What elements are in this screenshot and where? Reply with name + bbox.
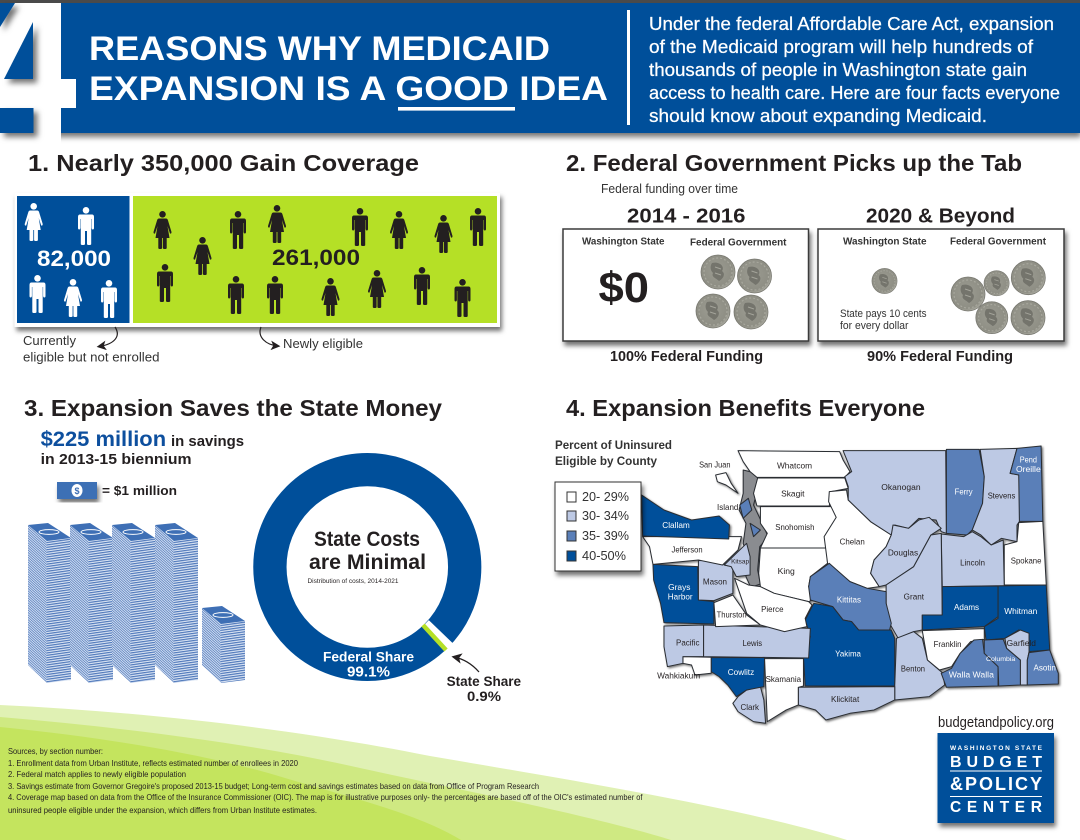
- sources text: 2. Federal match applies to newly eligible population: [8, 769, 186, 779]
- box: 2020 and beyond: for every dollar: [840, 320, 909, 332]
- county labels: Columbia: [986, 656, 1015, 663]
- heading 1: 1. Nearly 350,000 Gain Coverage: [28, 150, 419, 176]
- county labels: San Juan: [699, 459, 731, 469]
- key label: = $1 million: [102, 483, 177, 498]
- intro paragraph: Under the federal Affordable Care Act, expansion: [649, 14, 1054, 34]
- state share label: 0.9%: [467, 689, 501, 704]
- box: 2014-2016: Federal Government: [690, 236, 787, 248]
- header top rule: [0, 0, 1080, 3]
- arrow: currently eligible: [99, 327, 117, 346]
- county labels: Adams: [954, 602, 979, 612]
- caption 90 percent: 90% Federal Funding: [867, 348, 1013, 365]
- panel: 3 savings: [24, 395, 522, 704]
- county labels: Oreille: [1016, 464, 1041, 474]
- people frame: [14, 193, 500, 327]
- county labels: King: [778, 566, 795, 576]
- map legend: [555, 482, 641, 571]
- box: 2020 and beyond: Federal Government: [950, 236, 1046, 248]
- county labels: Thurston: [717, 610, 747, 620]
- county labels: Skagit: [781, 489, 805, 499]
- county labels: Yakima: [835, 649, 861, 659]
- label: currently eligible: [23, 333, 160, 364]
- donut center text: Distribution of costs, 2014-2021: [308, 578, 399, 585]
- county labels: Lincoln: [960, 557, 985, 567]
- newly eligible block: [133, 196, 497, 323]
- map legend: 20- 29%: [582, 489, 629, 504]
- county labels: Pend: [1020, 455, 1037, 465]
- county labels: Island: [717, 502, 739, 512]
- panel: 2 federal funding: [563, 150, 1064, 365]
- intro paragraph: should know about expanding Medicaid.: [649, 106, 987, 126]
- county labels: Klickitat: [831, 694, 860, 704]
- sources text: Sources, by section number:: [8, 746, 103, 756]
- box: 2020 and beyond: State pays 10 cents: [840, 308, 927, 320]
- arrow: newly eligible: [260, 327, 278, 346]
- donut center text: State Costs: [314, 528, 420, 551]
- sources text: 4. Coverage map based on data from the Office of the Insurance Commissioner (OIC). The map is for illustrative purposes only- the percentages are based off of the OIC's estimated number of: [8, 792, 643, 802]
- sources text: 1. Enrollment data from Urban Institute, reflects estimated number of enrollees in 2020: [8, 758, 298, 768]
- header blue band: [0, 2, 1080, 133]
- heading 2: 2. Federal Government Picks up the Tab: [566, 150, 1022, 176]
- title: EXPANSION IS A GOOD IDEA: [89, 70, 608, 108]
- label: currently eligible: Currently: [23, 333, 76, 348]
- county labels: Stevens: [988, 491, 1015, 501]
- map legend: 35- 39%: [582, 528, 629, 543]
- federal share label: Federal Share: [323, 650, 414, 664]
- county labels: Skamania: [766, 674, 801, 684]
- intro paragraph: [649, 14, 1060, 126]
- county labels: Kitsap: [731, 558, 749, 565]
- panel: 1 coverage: [14, 150, 500, 364]
- vertical divider: [627, 10, 630, 125]
- heading 4: 4. Expansion Benefits Everyone: [566, 395, 925, 421]
- county labels: Pacific: [676, 638, 700, 648]
- legend title: [555, 440, 672, 468]
- county shapes: [642, 446, 1058, 723]
- map legend: 40-50%: [582, 548, 626, 563]
- state share label: State Share: [447, 674, 522, 689]
- county labels: Harbor: [668, 591, 693, 601]
- arrow: state share: [454, 657, 479, 672]
- panel: 4 map: [555, 395, 1058, 723]
- title: REASONS WHY MEDICAID: [89, 30, 550, 68]
- icon: bill key: [57, 482, 97, 499]
- decorative green swoosh footer: [0, 705, 847, 840]
- state share label: [447, 674, 522, 704]
- federal share label: 99.1%: [347, 664, 390, 680]
- caption 100 percent: 100% Federal Funding: [610, 348, 763, 365]
- county labels: Ferry: [955, 486, 973, 496]
- county labels: Spokane: [1011, 555, 1042, 565]
- box: 2020 and beyond: Washington State: [843, 236, 927, 248]
- newly eligible block: 261,000: [272, 245, 360, 270]
- logo: BUDGET: [950, 754, 1042, 771]
- legend title: Eligible by County: [555, 456, 658, 468]
- savings callout: in savings: [171, 433, 244, 450]
- map of Washington counties: [642, 446, 1058, 723]
- county labels: Douglas: [888, 547, 918, 557]
- period label 2020: 2020 & Beyond: [866, 206, 1015, 228]
- county labels: Okanogan: [881, 482, 921, 492]
- legend title: Percent of Uninsured: [555, 440, 672, 452]
- intro paragraph: of the Medicaid program will help hundreds of: [649, 37, 1034, 57]
- box: 2020 and beyond: [818, 229, 1064, 341]
- county labels: Asotin: [1034, 663, 1056, 673]
- logo: &POLICY: [950, 774, 1042, 794]
- county labels: Whitman: [1004, 606, 1038, 616]
- map legend: 30- 34%: [582, 508, 629, 523]
- federal share label: [323, 650, 414, 680]
- header banner: [0, 0, 1080, 145]
- county labels: Benton: [901, 664, 925, 674]
- county labels: Snohomish: [775, 522, 815, 532]
- box: 2014-2016: $0: [598, 264, 649, 312]
- county labels: Grays: [668, 582, 691, 592]
- county labels: Cowlitz: [728, 667, 754, 677]
- intro paragraph: access to health care. Here are four facts everyone: [649, 83, 1060, 103]
- donut center text: [308, 528, 426, 585]
- box: 2014-2016: [563, 229, 808, 341]
- title: [89, 30, 608, 111]
- county labels: Garfield: [1007, 638, 1036, 648]
- county labels: Clark: [740, 702, 760, 712]
- county labels: Grant: [904, 591, 925, 601]
- savings callout: in 2013-15 biennium: [41, 451, 192, 468]
- county labels: Kittitas: [837, 595, 861, 605]
- logo: WASHINGTON STATE: [950, 745, 1043, 752]
- icon: bill key: $: [74, 486, 80, 496]
- county labels: Pierce: [761, 604, 784, 614]
- county labels: Walla Walla: [949, 669, 994, 679]
- county labels: Whatcom: [777, 461, 812, 471]
- county labels: Wahkiakum: [657, 670, 700, 680]
- county labels: Clallam: [662, 520, 690, 530]
- state share wedge: [423, 623, 453, 650]
- subheading: Federal funding over time: [601, 182, 738, 196]
- currently eligible block: [17, 196, 130, 323]
- currently eligible block: 82,000: [37, 246, 111, 271]
- intro paragraph: thousands of people in Washington state gain: [649, 60, 1027, 80]
- sources text: 3. Savings estimate from Governor Gregoire's proposed 2013-15 budget; Long-term cost and savings estimates based on data from Office of Program Research: [8, 781, 539, 791]
- county labels: Franklin: [934, 639, 962, 649]
- savings callout: [41, 428, 244, 468]
- sources text: [8, 746, 643, 815]
- county labels: Lewis: [743, 638, 762, 648]
- logo: CENTER: [950, 799, 1042, 816]
- donut center text: are Minimal: [309, 551, 426, 574]
- sources text: uninsured people eligible under the expansion, which differs from Urban Institute estimates.: [8, 805, 317, 815]
- county labels: [657, 455, 1056, 712]
- logo: [938, 733, 1054, 823]
- county labels: Jefferson: [672, 545, 703, 555]
- label: currently eligible: eligible but not enrolled: [23, 350, 160, 364]
- county labels: Mason: [703, 576, 727, 586]
- heading 3: 3. Expansion Saves the State Money: [24, 395, 442, 421]
- label: newly eligible: Newly eligible: [283, 336, 363, 351]
- website url: budgetandpolicy.org: [938, 714, 1054, 731]
- box: 2014-2016: Washington State: [582, 236, 665, 248]
- savings callout: $225 million: [41, 428, 166, 451]
- stacks of bills: [28, 523, 245, 683]
- period label 2014-2016: 2014 - 2016: [627, 206, 746, 228]
- donut chart: [270, 470, 465, 680]
- big number 4: [0, 3, 76, 145]
- county labels: Chelan: [840, 536, 865, 546]
